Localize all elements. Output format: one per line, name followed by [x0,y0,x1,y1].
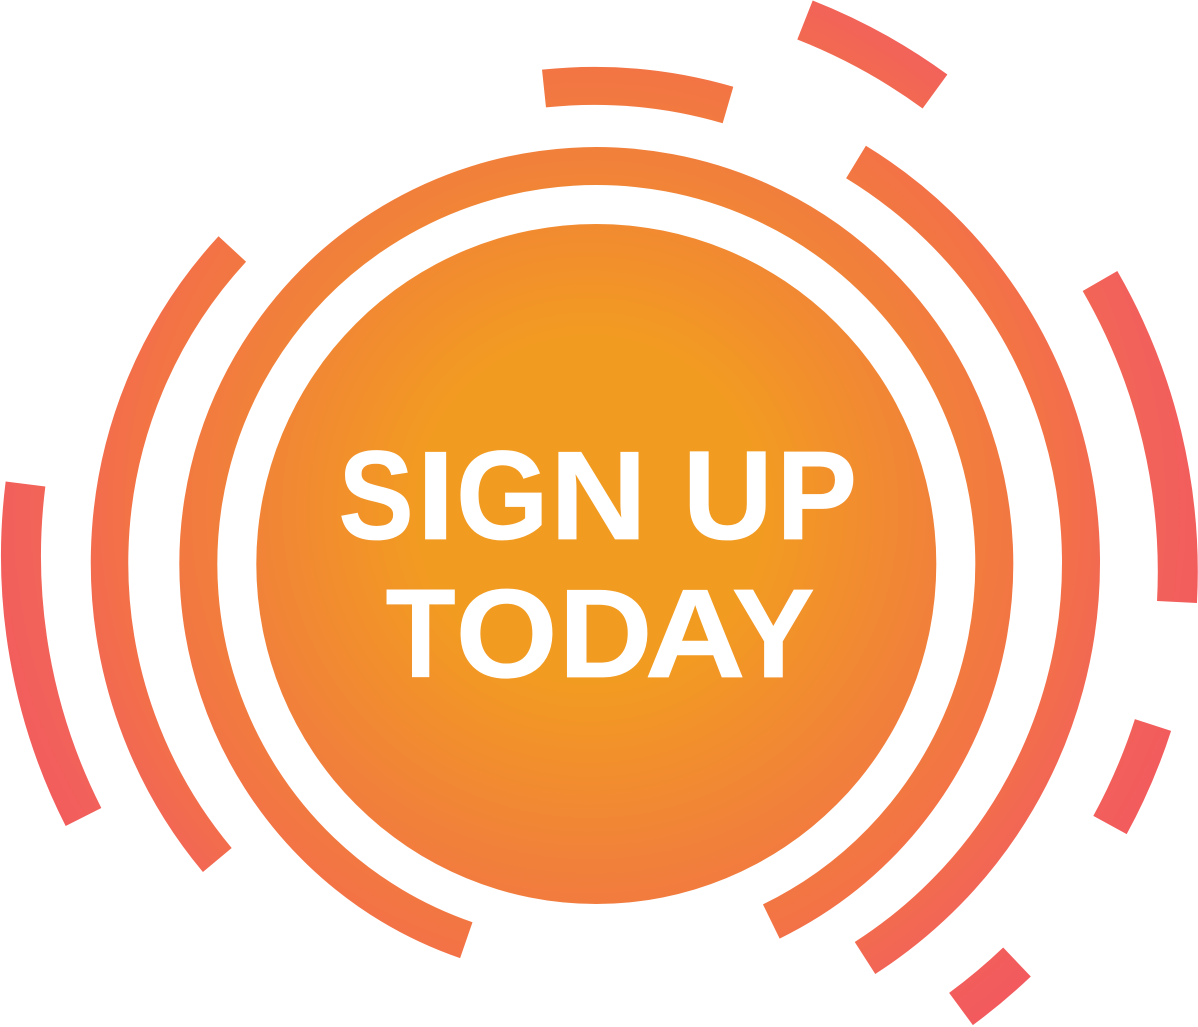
top right outer arc [805,20,935,92]
lower right outer arc [1110,725,1153,825]
top short arc [544,86,728,105]
right outer arc [1100,281,1178,602]
heading: sign up today: I [416,425,455,566]
central orange circle [256,224,936,904]
heading: sign up today: N [550,425,647,566]
heading: sign up today: O [456,564,558,704]
heading: sign up today: S [338,426,414,566]
left outer arc [21,484,84,817]
inner ring arc [198,166,994,940]
heading: sign up today: T [386,563,456,704]
heading: sign up today: P [776,426,857,567]
heading: sign up today: Y [732,564,815,704]
heading: sign up today: U [683,425,773,566]
heading: sign up today: D [559,564,652,705]
bottom right outer arc [961,962,1017,1009]
heading: sign up today [338,425,857,705]
heading: sign up today: G [456,425,549,566]
right middle arc [856,162,1081,958]
heading: sign up today: A [645,563,746,704]
left middle arc [110,249,232,860]
